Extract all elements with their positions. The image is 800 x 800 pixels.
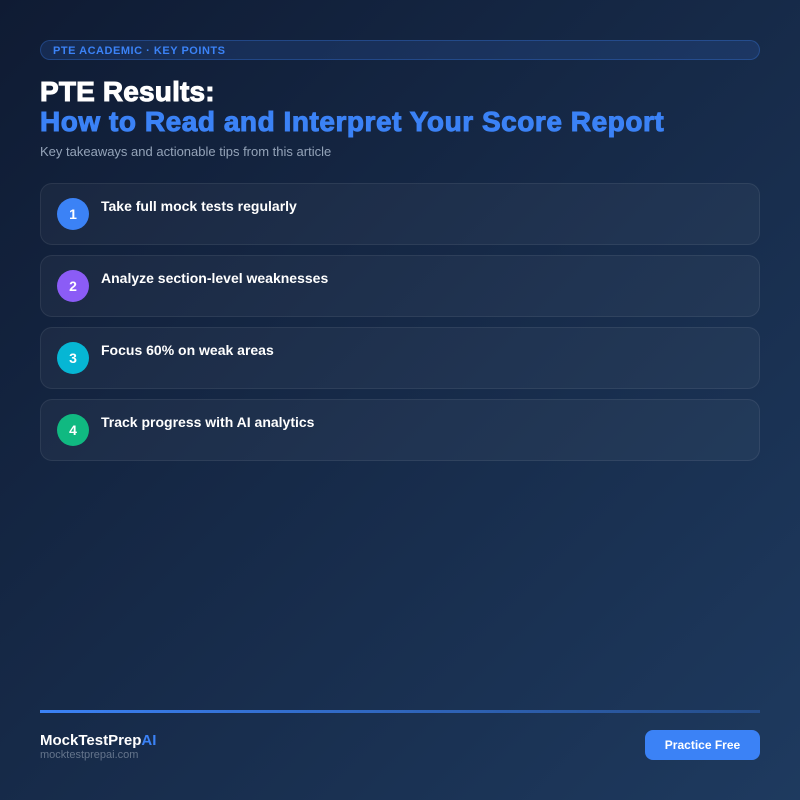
number badge 3: [57, 342, 89, 374]
number badge 4: [57, 414, 89, 446]
badge: PTE Academic key points: [40, 40, 760, 60]
title: [40, 76, 664, 138]
point 3 text: Focus 60% on weak areas: [101, 342, 274, 358]
panel: point 1: [40, 183, 760, 245]
number badge 2: [57, 270, 89, 302]
button: Practice Free: Practice Free: [665, 738, 740, 752]
number badge 2: 2: [69, 278, 77, 294]
panel: point 3: [40, 327, 760, 389]
brand name: MockTestPrepAI: [40, 732, 156, 749]
button: Practice Free: [645, 730, 760, 760]
panel: point 4: [40, 399, 760, 461]
point 2 text: Analyze section-level weaknesses: [101, 270, 328, 286]
point 4 text: Track progress with AI analytics: [101, 414, 314, 430]
title: How to Read and Interpret Your Score Report: [40, 106, 664, 137]
badge: PTE Academic key points: PTE ACADEMIC · KEY POINTS: [53, 45, 226, 57]
number badge 1: [57, 198, 89, 230]
number badge 1: 1: [69, 206, 77, 222]
title: PTE Results:: [40, 76, 215, 107]
point 1 text: Take full mock tests regularly: [101, 198, 297, 214]
number badge 3: 3: [69, 350, 77, 366]
number badge 4: 4: [69, 422, 77, 438]
footer accent line: [40, 710, 760, 713]
panel: point 2: [40, 255, 760, 317]
subtitle: Key takeaways and actionable tips from this article: [40, 144, 331, 159]
brand url: mocktestprepai.com: [40, 749, 138, 761]
